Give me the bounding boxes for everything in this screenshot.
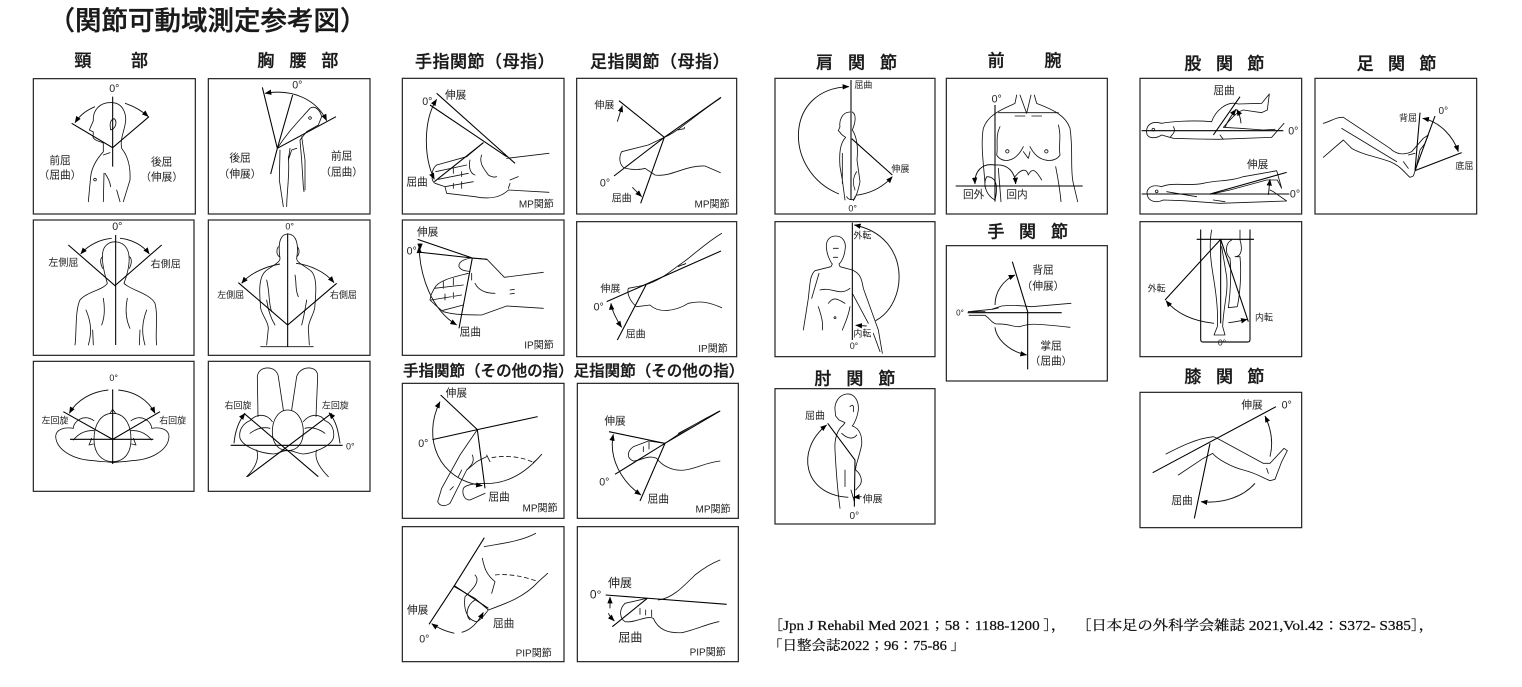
- panel: great toe IP joint: 伸展: [600, 283, 620, 295]
- panel: shoulder abduction and adduction: 0°: [850, 341, 859, 351]
- panel: hip abduction and adduction: 内転: [1255, 312, 1273, 323]
- references: 「日整会誌2022；96：75-86 」: [768, 637, 965, 653]
- panel: thoracolumbar rotation: [208, 361, 370, 491]
- panel: wrist flexion and extension: （伸展）: [1022, 279, 1064, 292]
- panel: ankle dorsiflexion and plantar flexion: 0°: [1439, 106, 1448, 117]
- heading: finger joint (other fingers): 手指関節（その他の指）足指関節（その他の指）: [403, 362, 744, 380]
- panel: thoracolumbar rotation: 右回旋: [225, 400, 251, 411]
- heading: finger joint (thumb): 手指関節（母指）: [415, 53, 555, 72]
- panel: great toe MP joint: [577, 78, 737, 214]
- panel: finger PIP joint: 屈曲: [493, 618, 514, 630]
- panel: toe MP joint: 屈曲: [648, 493, 669, 505]
- panel: neck rotation: 0°: [109, 373, 118, 383]
- panel: great toe MP joint: 屈曲: [612, 192, 632, 204]
- panel: thoracolumbar flexion and extension: 0°: [292, 79, 302, 91]
- panel: elbow flexion and extension: 0°: [850, 511, 859, 522]
- panel: shoulder flexion and extension: [775, 78, 935, 214]
- panel: toe PIP joint: 屈曲: [618, 631, 642, 645]
- panel: forearm pronation and supination: 回内: [1006, 188, 1028, 201]
- panel: thumb MP joint: [402, 78, 564, 214]
- panel: neck rotation: [33, 361, 194, 491]
- panel: toe PIP joint: PIP関節: [690, 646, 726, 659]
- panel: neck lateral bending: 左側屈: [48, 256, 78, 269]
- panel: thoracolumbar lateral bending: [208, 220, 370, 355]
- panel: thumb IP joint: 屈曲: [460, 327, 481, 339]
- panel: thoracolumbar flexion and extension: （伸展）: [219, 167, 261, 180]
- panel: toe MP joint: 伸展: [604, 415, 626, 427]
- panel: finger MP joint: 0°: [418, 438, 428, 450]
- panel: toe MP joint: [577, 383, 738, 518]
- panel: shoulder abduction and adduction: 外転: [853, 230, 871, 241]
- heading: thoracolumbar: 胸腰部: [257, 51, 338, 70]
- panel: great toe IP joint: IP関節: [698, 342, 728, 355]
- panel: finger MP joint: 屈曲: [488, 491, 510, 503]
- panel: neck flexion and extension: 後屈: [151, 156, 172, 169]
- panel: neck flexion and extension: （伸展）: [140, 171, 183, 184]
- heading: ankle joint: 足関節: [1357, 54, 1436, 73]
- panel: hip abduction and adduction: 外転: [1148, 282, 1166, 293]
- panel: neck rotation: 左回旋: [42, 414, 68, 425]
- panel: knee flexion and extension: [1140, 392, 1302, 528]
- panel: toe MP joint: 0°: [599, 477, 609, 489]
- panel: finger PIP joint: PIP関節: [516, 647, 552, 660]
- panel: finger PIP joint: 伸展: [407, 605, 429, 617]
- panel: knee flexion and extension: 0°: [1282, 400, 1292, 412]
- panel: ankle dorsiflexion and plantar flexion: 背屈: [1399, 112, 1417, 123]
- panel: thumb MP joint: 0°: [422, 96, 432, 108]
- panel: hip abduction and adduction: [1140, 222, 1302, 357]
- panel: great toe IP joint: [577, 222, 737, 357]
- panel: hip abduction and adduction: 0°: [1218, 338, 1226, 348]
- panel: shoulder flexion and extension: 0°: [848, 203, 857, 213]
- panel: wrist flexion and extension: [946, 246, 1107, 381]
- panel: knee flexion and extension: 屈曲: [1171, 495, 1193, 507]
- panel: thoracolumbar rotation: 左回旋: [322, 400, 349, 411]
- panel: hip flexion and extension: [1140, 78, 1302, 214]
- heading: neck: 頸部: [74, 51, 148, 70]
- heading: hip joint: 股関節: [1184, 54, 1264, 73]
- panel: hip flexion and extension: 0°: [1290, 188, 1300, 200]
- panel: ankle dorsiflexion and plantar flexion: [1315, 78, 1477, 214]
- panel: elbow flexion and extension: 伸展: [863, 493, 883, 505]
- heading: forearm: 前腕: [988, 52, 1061, 71]
- panel: thumb MP joint: MP関節: [519, 197, 554, 210]
- references: [768, 617, 1434, 653]
- title: （関節可動域測定参考図）: [48, 6, 366, 36]
- panel: hip flexion and extension: 屈曲: [1213, 85, 1235, 97]
- heading: knee joint: 膝関節: [1184, 368, 1264, 387]
- heading: shoulder joint: 肩関節: [816, 53, 897, 72]
- panel: thumb IP joint: 伸展: [417, 226, 439, 238]
- panel: thumb MP joint: 伸展: [445, 89, 467, 101]
- panel: forearm pronation and supination: [946, 78, 1107, 214]
- panel: toe PIP joint: 0°: [590, 587, 602, 601]
- panel: thoracolumbar flexion and extension: 後屈: [229, 151, 251, 164]
- panel: thoracolumbar rotation: 0°: [346, 441, 355, 451]
- panel: finger PIP joint: 0°: [419, 633, 429, 645]
- panel: wrist flexion and extension: 背屈: [1032, 263, 1054, 276]
- panel: finger PIP joint: [402, 527, 564, 662]
- panel: thoracolumbar lateral bending: 0°: [285, 221, 294, 231]
- panel: neck flexion and extension: [33, 79, 195, 214]
- heading: wrist joint: 手関節: [987, 223, 1068, 242]
- references: ［日本足の外科学会雑誌 2021,Vol.42：S372- S385］，: [1076, 617, 1434, 634]
- panel: thoracolumbar lateral bending: 左側屈: [217, 289, 244, 300]
- panel: shoulder abduction and adduction: 内転: [853, 328, 871, 339]
- panel: forearm pronation and supination: 0°: [992, 94, 1002, 106]
- references: ［Jpn J Rehabil Med 2021；58：1188-1200 ］，: [768, 618, 1066, 634]
- panel: great toe MP joint: 伸展: [594, 100, 614, 112]
- panel: thoracolumbar lateral bending: 右側屈: [330, 289, 357, 300]
- panel: ankle dorsiflexion and plantar flexion: 底屈: [1455, 161, 1473, 171]
- panel: toe MP joint: MP関節: [696, 502, 730, 515]
- panel: finger MP joint: 伸展: [446, 388, 467, 400]
- heading: elbow joint: 肘関節: [814, 370, 895, 389]
- panel: forearm pronation and supination: 回外: [963, 189, 985, 201]
- panel: wrist flexion and extension: 掌屈: [1040, 339, 1062, 352]
- panel: neck flexion and extension: （屈曲）: [39, 169, 81, 182]
- panel: thumb IP joint: IP関節: [524, 339, 554, 352]
- panel: thoracolumbar flexion and extension: 前屈: [331, 149, 352, 162]
- panel: hip flexion and extension: 0°: [1288, 126, 1298, 138]
- panel: wrist flexion and extension: （屈曲）: [1030, 354, 1072, 367]
- panel: great toe IP joint: 0°: [594, 302, 604, 314]
- panel: finger MP joint: MP関節: [523, 502, 557, 515]
- panel: elbow flexion and extension: [775, 389, 935, 524]
- panel: shoulder flexion and extension: 伸展: [891, 163, 909, 174]
- panel: neck flexion and extension: 0°: [109, 83, 119, 95]
- panel: wrist flexion and extension: 0°: [956, 308, 964, 317]
- panel: finger MP joint: [402, 383, 564, 518]
- panel: hip flexion and extension: 伸展: [1247, 159, 1269, 171]
- panel: neck lateral bending: 右側屈: [151, 257, 181, 270]
- panel: neck lateral bending: [33, 220, 194, 355]
- panel: great toe MP joint: MP関節: [695, 198, 729, 211]
- panel: thumb IP joint: [402, 220, 564, 355]
- panel: toe PIP joint: 伸展: [608, 576, 632, 590]
- heading: toe joint (great toe): 足指関節（母指）: [590, 53, 730, 72]
- panel: elbow flexion and extension: 屈曲: [805, 410, 825, 422]
- panel: toe PIP joint: [577, 527, 738, 662]
- panel: thoracolumbar flexion and extension: [208, 79, 370, 214]
- panel: great toe IP joint: 屈曲: [626, 329, 646, 341]
- panel: shoulder abduction and adduction: [775, 222, 935, 357]
- panel: great toe MP joint: 0°: [600, 178, 610, 190]
- panel: neck flexion and extension: 前屈: [49, 154, 71, 167]
- panel: shoulder flexion and extension: 屈曲: [854, 80, 872, 90]
- panel: neck lateral bending: 0°: [112, 221, 122, 233]
- panel: thoracolumbar flexion and extension: （屈曲）: [320, 165, 363, 178]
- panel: thumb MP joint: 屈曲: [406, 176, 428, 188]
- panel: knee flexion and extension: 伸展: [1241, 400, 1263, 412]
- panel: thumb IP joint: 0°: [407, 246, 417, 258]
- panel: neck rotation: 右回旋: [159, 414, 186, 425]
